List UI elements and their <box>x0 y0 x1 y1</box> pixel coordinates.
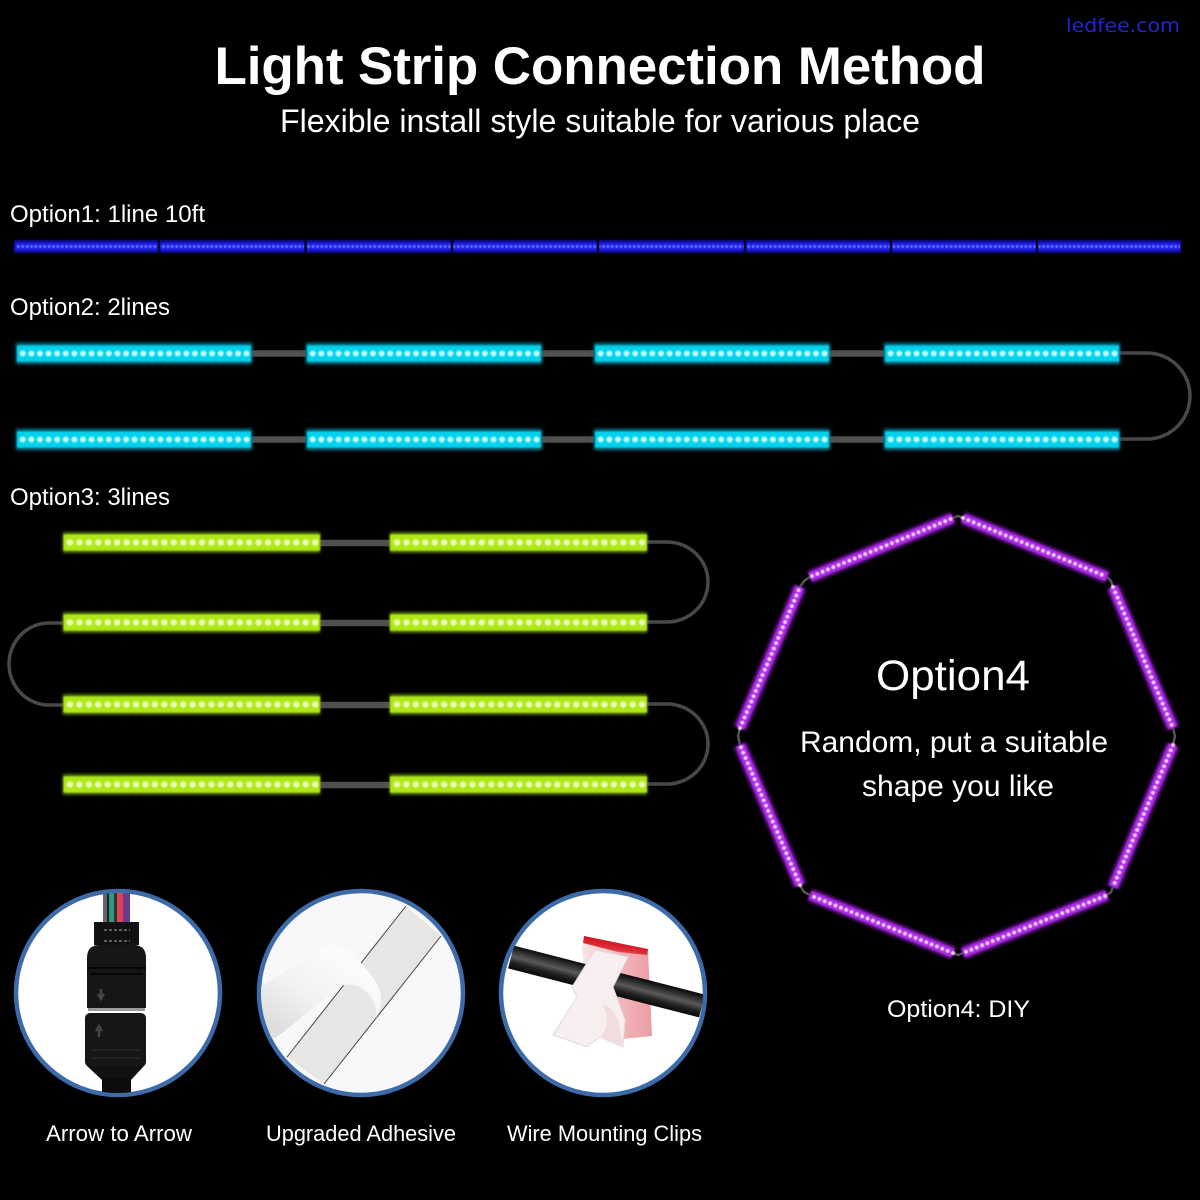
strip: option 4 purple octagon <box>738 516 1175 955</box>
icon: wire mounting clip <box>501 891 705 1095</box>
label: option 1: Option1: 1line 10ft <box>10 201 205 228</box>
text: option 4 description <box>800 726 1108 803</box>
watermark: ledfee.com <box>1066 15 1180 37</box>
heading: option 4: Option4 <box>876 652 1030 700</box>
title: Light Strip Connection Method <box>214 37 986 96</box>
text: option 4 description: shape you like <box>862 770 1054 803</box>
strip: option 2 two cyan rows <box>16 353 1190 440</box>
icon: upgraded adhesive tape <box>255 891 463 1095</box>
caption: arrow to arrow: Arrow to Arrow <box>46 1121 192 1146</box>
label: option 4 DIY: Option4: DIY <box>887 996 1030 1023</box>
text: option 4 description: Random, put a suitable <box>800 726 1108 759</box>
icon: arrow to arrow connector <box>16 890 220 1100</box>
caption: upgraded adhesive: Upgraded Adhesive <box>266 1121 456 1146</box>
caption: wire mounting clips: Wire Mounting Clips <box>507 1121 702 1146</box>
strip: option 3 three green loops <box>9 542 708 785</box>
label: option 2: Option2: 2lines <box>10 294 170 321</box>
subtitle: Flexible install style suitable for various place <box>280 103 920 139</box>
label: option 3: Option3: 3lines <box>10 484 170 511</box>
strip: option 1 blue line <box>14 240 1181 253</box>
